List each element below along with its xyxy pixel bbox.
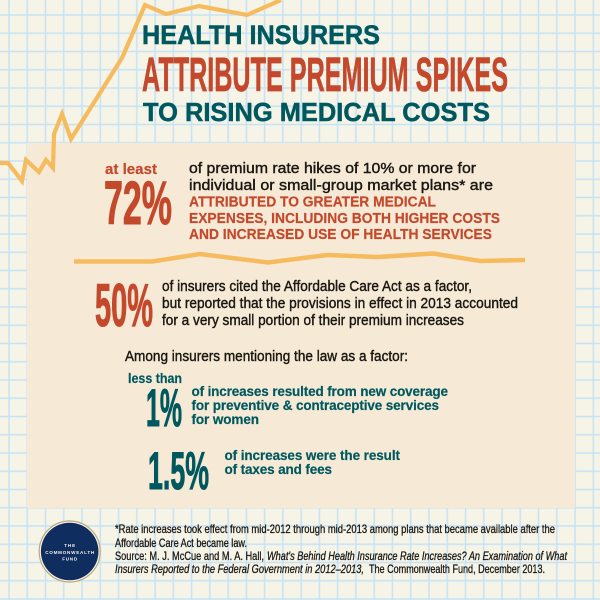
wavy divider line (74, 254, 525, 262)
text block: 1.5% description: of taxes and fees (224, 462, 332, 477)
logo: The Commonwealth Fund (39, 521, 100, 582)
logo: The Commonwealth Fund: COMMONWEALTH (45, 550, 95, 555)
text block: 50% description: for a very small portion of their premium increases (162, 313, 464, 329)
label: at least: at least (105, 161, 157, 178)
title line 1: HEALTH INSURERS (142, 20, 380, 50)
label: less than: less than (128, 370, 182, 386)
text block: 1% description (192, 384, 448, 427)
number: 72%: 72% (104, 169, 172, 237)
title line 3: TO RISING MEDICAL COSTS (143, 97, 490, 127)
logo: The Commonwealth Fund: THE (64, 543, 75, 548)
title (142, 20, 508, 127)
footnote and source: Affordable Care Act became law. (115, 536, 247, 550)
subheading: among insurers: Among insurers mentioning the law as a factor: (125, 349, 408, 365)
text block: 50% description: of insurers cited the Affordable Care Act as a factor, (162, 279, 472, 295)
footnote and source: The Commonwealth Fund, December 2013. (369, 562, 545, 576)
text block: 72% description: AND INCREASED USE OF HEALTH SERVICES (189, 227, 492, 243)
text block: 72% description: ATTRIBUTED TO GREATER MEDICAL (189, 194, 436, 210)
infographic canvas: 1% (146, 379, 182, 438)
text block: 1% description: for women (192, 412, 259, 427)
text block: 50% description: but reported that the provisions in effect in 2013 accounted (162, 296, 518, 312)
text block: 72% description (189, 161, 500, 243)
stat: 1.5%: 1.5% (148, 442, 209, 501)
text block: 72% description: of premium rate hikes of 10% or more for (189, 161, 476, 177)
footnote and source (115, 522, 568, 576)
infographic canvas: 50% (95, 272, 153, 339)
text block: 72% description: individual or small-group market plans* are (189, 178, 493, 194)
logo: The Commonwealth Fund: FUND (62, 556, 78, 562)
stat: at least 72% (104, 161, 172, 237)
text block: 1.5% description: of increases were the result (224, 448, 400, 463)
text block: 50% description (162, 279, 518, 329)
text block: 72% description: EXPENSES, INCLUDING BOTH HIGHER COSTS (189, 211, 500, 227)
footnote and source: Source: M. J. McCue and M. A. Hall, (115, 549, 264, 563)
rising line chart (0, 0, 281, 181)
text block: 1.5% description (224, 448, 400, 477)
panel: key findings background (27, 143, 575, 508)
text block: 1% description: of increases resulted from new coverage (192, 384, 448, 399)
footnote and source: Insurers Reported to the Federal Government in 2012–2013, (115, 562, 364, 576)
text block: 1% description: for preventive & contraceptive services (192, 398, 439, 413)
stat: less than 1% (128, 370, 182, 438)
